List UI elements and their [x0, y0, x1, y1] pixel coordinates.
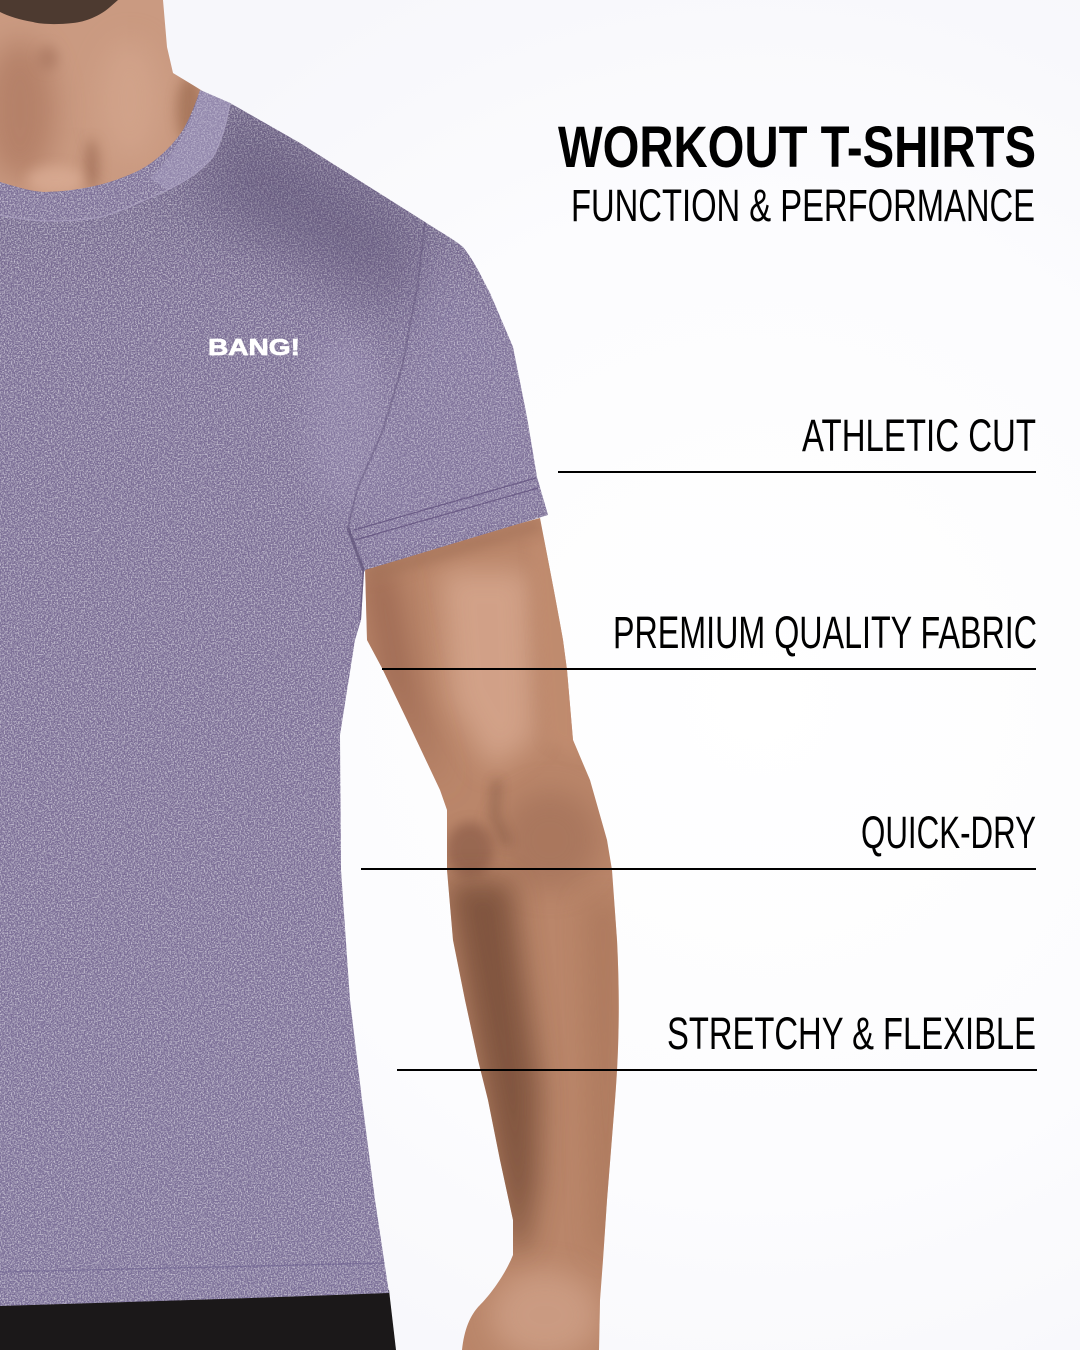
collar light rib	[150, 90, 230, 190]
hand highlight	[490, 1270, 600, 1350]
sleeve tone	[444, 452, 445, 453]
elbow crease	[494, 780, 508, 845]
armpit light	[311, 340, 379, 498]
elbow shading	[500, 790, 600, 890]
upper arm light	[440, 570, 535, 770]
neck and chin	[0, 0, 210, 200]
collar stitching	[0, 103, 230, 221]
shorts	[0, 1290, 396, 1350]
upper arm inner shadow	[365, 570, 434, 768]
bottom hem	[0, 1263, 385, 1272]
shoulder shadow	[190, 103, 425, 320]
arm	[365, 518, 619, 1350]
forearm right tone	[589, 896, 619, 1250]
cuff cast shadow	[376, 518, 538, 572]
upper arm right tone	[544, 538, 580, 755]
sleeve seam	[348, 222, 425, 528]
sleeve hem stitching	[354, 478, 538, 540]
t-shirt body	[0, 90, 548, 1306]
collar	[0, 90, 230, 221]
armpit fold	[348, 528, 364, 620]
logo: BANG!: BANG!	[208, 334, 300, 360]
forearm dark side	[445, 880, 540, 1250]
model photo illustration	[0, 0, 640, 1350]
beard shadow	[0, 0, 118, 24]
